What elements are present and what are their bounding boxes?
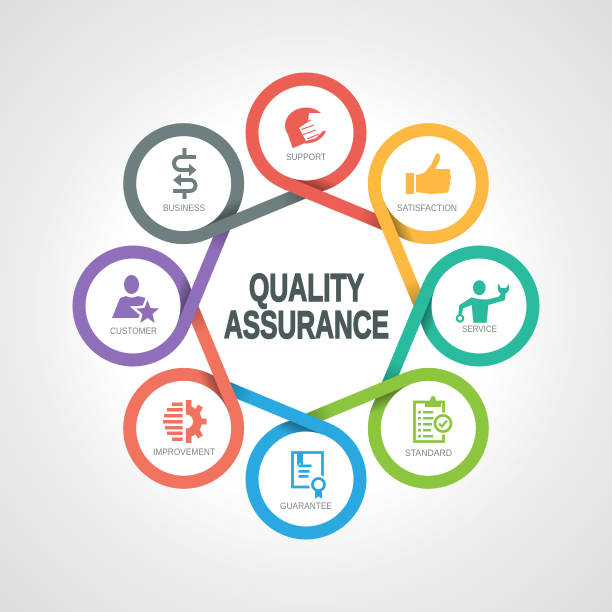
icon: mechanic with wrench <box>457 280 509 323</box>
label: service: SERVICE <box>462 324 497 334</box>
item: service <box>457 280 509 334</box>
item: standard <box>405 396 454 458</box>
ribbon: business (grey) <box>107 88 306 287</box>
label: standard: STANDARD <box>405 448 452 458</box>
label: improvement: IMPROVEMENT <box>153 447 215 457</box>
ribbon: improvement (coral) <box>88 306 287 505</box>
label: satisfaction: SATISFACTION <box>397 203 457 213</box>
ribbon: service (teal) <box>387 252 533 387</box>
icon: half gear with stripes <box>163 400 206 443</box>
ribbon: support (red) <box>252 79 387 225</box>
item: improvement <box>153 400 215 457</box>
title: QUALITY <box>249 267 364 310</box>
icon: helping hand speech bubble <box>285 108 330 148</box>
label: business: BUSINESS <box>163 203 205 213</box>
title <box>224 267 389 347</box>
ribbon: standard (green) <box>306 325 505 524</box>
title: ASSURANCE <box>224 304 389 347</box>
item: customer <box>110 275 159 336</box>
label: support: SUPPORT <box>286 152 326 162</box>
icon: dollar sign with arrows <box>173 148 196 199</box>
item: guarantee <box>280 452 332 511</box>
label: customer: CUSTOMER <box>110 326 157 336</box>
icon: thumbs up <box>406 153 451 194</box>
icon: clipboard checklist <box>414 396 454 442</box>
label: guarantee: GUARANTEE <box>280 501 332 511</box>
ribbon: customer (purple) <box>79 225 225 360</box>
red tail overlap over grey tail <box>285 183 341 206</box>
item: satisfaction <box>397 153 457 213</box>
icon: person with star <box>112 275 159 323</box>
item: business <box>163 148 205 213</box>
item: support <box>285 108 330 162</box>
ribbon: guarantee (blue) <box>225 387 360 533</box>
icon: certificate with seal <box>292 452 328 499</box>
ribbon: satisfaction (yellow) <box>325 107 524 306</box>
